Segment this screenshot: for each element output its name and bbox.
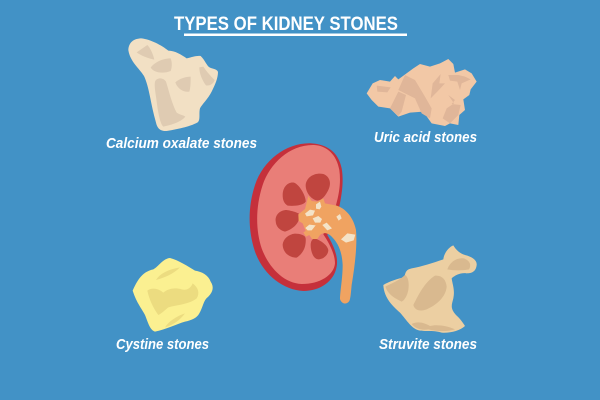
- title: TYPES OF KIDNEY STONES: [174, 13, 398, 35]
- kidney outer capsule: [250, 143, 343, 291]
- label: struvite stones: Struvite stones: [379, 336, 477, 353]
- calyx left: [276, 210, 300, 232]
- label: cystine stones: Cystine stones: [116, 336, 209, 353]
- calyx lower left: [283, 234, 306, 258]
- icon: kidney diagram: [250, 143, 356, 304]
- calyx top: [306, 174, 330, 201]
- label: uric acid stones: Uric acid stones: [374, 129, 477, 146]
- stones inside the kidney: [305, 202, 355, 243]
- calyx bottom: [311, 238, 328, 259]
- label: calcium oxalate stones: Calcium oxalate stones: [106, 135, 257, 152]
- icon: cystine stone: [133, 258, 213, 332]
- icon: struvite stone: [383, 245, 477, 333]
- renal pelvis and ureter: [298, 196, 356, 304]
- calyx upper left: [283, 183, 306, 206]
- icon: calcium oxalate stone: [128, 38, 218, 131]
- icon: uric acid stone: [367, 59, 477, 126]
- kidney inner tissue: [257, 145, 340, 284]
